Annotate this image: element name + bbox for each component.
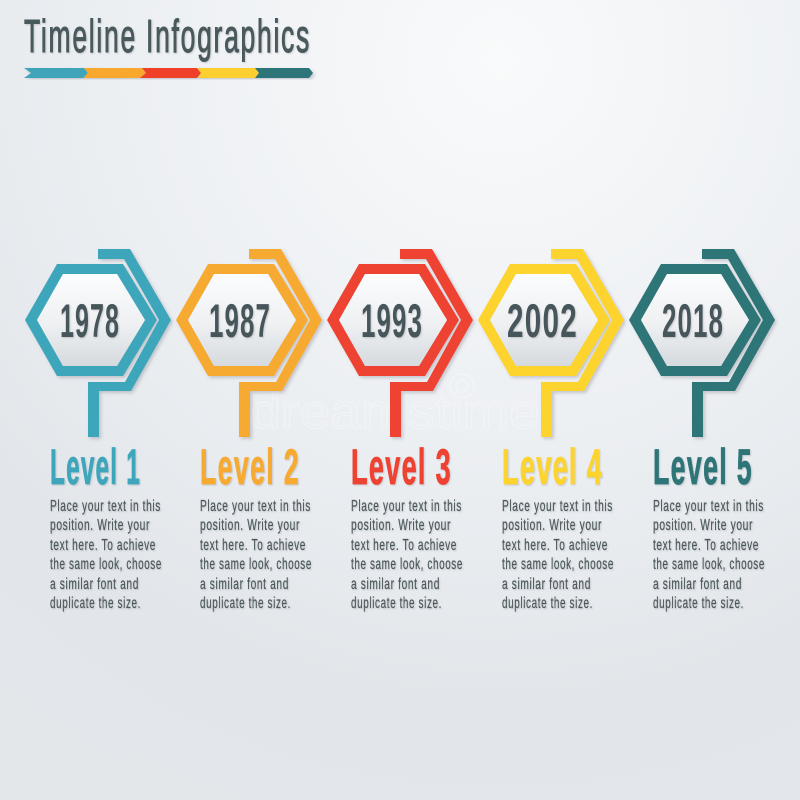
outer bracket and pole 3 — [390, 249, 473, 437]
body text 3: duplicate the size. — [351, 595, 442, 612]
body text 5 — [653, 498, 765, 612]
body text 2: position. Write your — [200, 517, 300, 534]
body text 1: the same look, choose — [50, 556, 162, 573]
body text 5: duplicate the size. — [653, 595, 744, 612]
outer bracket and pole 2 — [239, 249, 322, 437]
body text 2: Place your text in this — [200, 498, 311, 515]
level heading 4: Level 4 — [502, 439, 603, 495]
body text 1: Place your text in this — [50, 498, 161, 515]
timeline step 3 — [327, 249, 473, 612]
outer bracket and pole 1 — [88, 249, 171, 437]
timeline step 2 — [176, 249, 322, 612]
timeline step 4 — [478, 249, 624, 612]
body text 3: the same look, choose — [351, 556, 463, 573]
outer bracket and pole 5 — [692, 249, 775, 437]
body text 4: the same look, choose — [502, 556, 614, 573]
timeline step 1: Level 1 — [50, 439, 141, 495]
body text 4: Place your text in this — [502, 498, 613, 515]
year 5: 2018 — [662, 294, 724, 347]
body text 2: a similar font and — [200, 576, 289, 593]
body text 4: position. Write your — [502, 517, 602, 534]
outer bracket and pole 4 — [541, 249, 624, 437]
level heading 3: Level 3 — [351, 439, 452, 495]
level heading 2: Level 2 — [200, 439, 300, 495]
hexagon 4 — [478, 264, 610, 376]
hexagon 5 — [629, 264, 761, 376]
body text 3: a similar font and — [351, 576, 440, 593]
year 3: 1993 — [361, 294, 423, 347]
body text 1: duplicate the size. — [50, 595, 141, 612]
title: Timeline Infographics — [24, 10, 311, 62]
body text 1: position. Write your — [50, 517, 150, 534]
body text 4: duplicate the size. — [502, 595, 593, 612]
body text 1 — [50, 498, 162, 612]
body text 3: Place your text in this — [351, 498, 462, 515]
year 4: 2002 — [507, 294, 578, 347]
body text 1: text here. To achieve — [50, 537, 156, 554]
body text 4: text here. To achieve — [502, 537, 608, 554]
title arrow bar — [24, 68, 313, 78]
hexagon 2 — [176, 264, 308, 376]
timeline step 5 — [629, 249, 775, 612]
body text 2: the same look, choose — [200, 556, 312, 573]
body text 3 — [351, 498, 463, 612]
year 1: 1978 — [60, 294, 120, 347]
watermark: dreamstime — [250, 386, 540, 439]
body text 1: a similar font and — [50, 576, 139, 593]
body text 4: a similar font and — [502, 576, 591, 593]
year 2: 1987 — [209, 294, 271, 347]
timeline step 1 — [25, 249, 171, 612]
body text 3: position. Write your — [351, 517, 451, 534]
hexagon 1 — [25, 264, 157, 376]
body text 3: text here. To achieve — [351, 537, 457, 554]
body text 5: a similar font and — [653, 576, 742, 593]
hexagon 3 — [327, 264, 459, 376]
body text 2: duplicate the size. — [200, 595, 291, 612]
body text 2: text here. To achieve — [200, 537, 306, 554]
body text 2 — [200, 498, 312, 612]
body text 4 — [502, 498, 614, 612]
